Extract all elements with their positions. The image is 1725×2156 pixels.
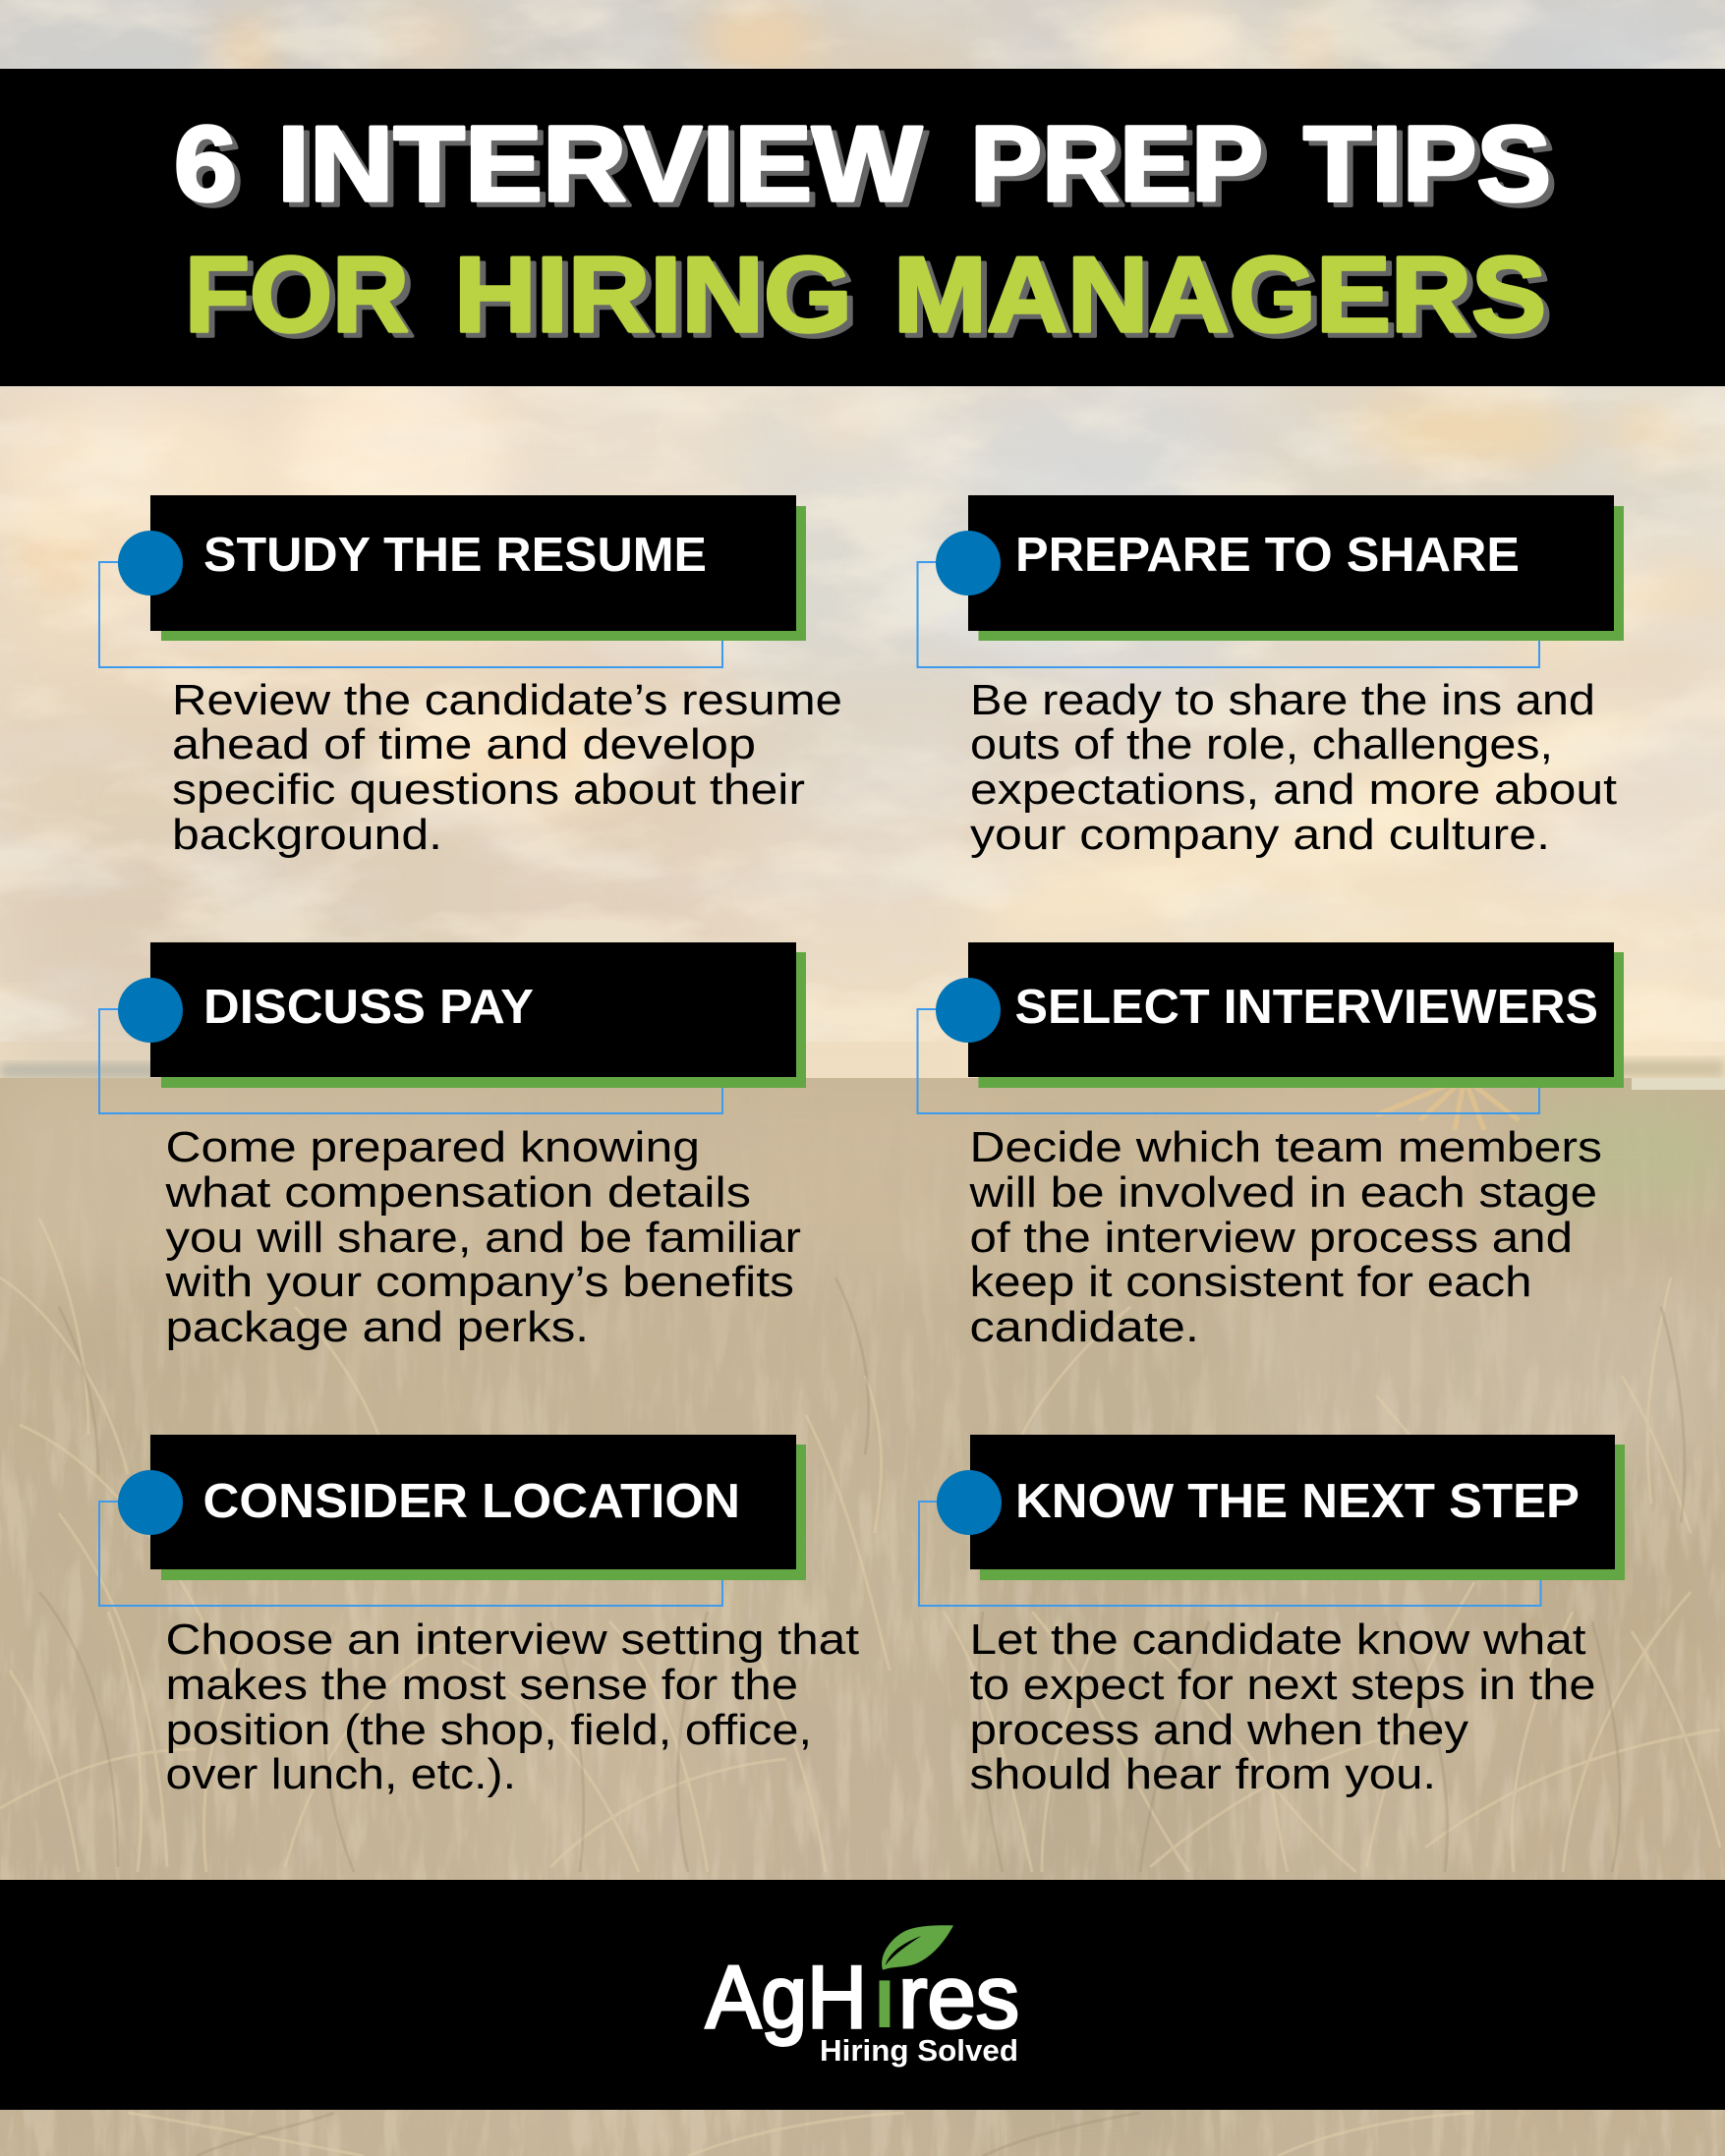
body text: keep it consistent for each — [969, 1258, 1531, 1306]
sun rays — [1376, 1088, 1520, 1131]
panel: know the next step — [919, 1435, 1625, 1798]
body text: over lunch, etc.). — [165, 1750, 516, 1798]
green offset shadow — [161, 952, 806, 1088]
body text — [968, 1123, 1602, 1351]
body text: outs of the role, challenges, — [970, 720, 1553, 768]
body text: position (the shop, field, office, — [165, 1706, 812, 1754]
body text — [172, 676, 842, 859]
blue dot — [936, 978, 1001, 1043]
heading: KNOW THE NEXT STEP — [1015, 1475, 1580, 1528]
logo: AgHires Hiring Solved: i — [874, 1949, 895, 2047]
straw texture — [0, 1315, 1725, 2156]
distant tree line, left — [0, 1063, 206, 1078]
heading: CONSIDER LOCATION — [202, 1475, 740, 1528]
body text: Decide which team members — [969, 1123, 1602, 1171]
connector outline — [99, 562, 722, 667]
wheat strands, light — [0, 1219, 1720, 2156]
body text: Choose an interview setting that — [165, 1616, 859, 1664]
heading bar — [150, 1435, 796, 1569]
body text — [165, 1616, 859, 1798]
panel: study the resume — [99, 495, 842, 859]
body text: expectations, and more about — [970, 766, 1617, 814]
heading bar — [968, 495, 1614, 631]
title line 2 — [185, 235, 1546, 355]
body text: Come prepared knowing — [165, 1123, 700, 1171]
body text — [969, 1616, 1596, 1798]
heading: DISCUSS PAY — [203, 981, 534, 1034]
logo: AgHires Hiring Solved: Hiring Solved — [820, 2033, 1018, 2068]
body text: your company and culture. — [970, 811, 1550, 859]
logo: AgHires Hiring Solved: AgH — [706, 1949, 867, 2047]
blue dot — [937, 1470, 1002, 1535]
title line 1: TIPS — [1303, 104, 1551, 224]
body text: of the interview process and — [969, 1214, 1573, 1262]
blue dot — [118, 1470, 183, 1535]
connector outline — [918, 562, 1539, 667]
body text: what compensation details — [164, 1168, 751, 1217]
body text: background. — [172, 811, 442, 859]
body text: Let the candidate know what — [969, 1616, 1586, 1664]
body text: specific questions about their — [172, 766, 805, 814]
green offset shadow — [979, 952, 1624, 1088]
panel: prepare to share — [918, 495, 1624, 859]
title line 2: FOR — [185, 235, 409, 355]
connector outline — [99, 1009, 722, 1113]
green offset shadow — [979, 506, 1624, 641]
title line 1: 6 — [174, 104, 237, 224]
body text: with your company’s benefits — [164, 1258, 794, 1306]
body text: makes the most sense for the — [165, 1661, 798, 1709]
body text: process and when they — [969, 1706, 1468, 1754]
blue dot — [936, 531, 1001, 596]
body text: will be involved in each stage — [968, 1168, 1597, 1217]
heading: STUDY THE RESUME — [203, 529, 707, 582]
title line 1 — [174, 104, 1551, 224]
heading bar — [970, 1435, 1615, 1569]
logo: AgHires Hiring Solved — [706, 1925, 1019, 2068]
body text — [164, 1123, 801, 1351]
body text — [970, 676, 1617, 859]
connector outline — [919, 1502, 1541, 1606]
panel: discuss pay — [99, 942, 806, 1351]
body text: should hear from you. — [969, 1750, 1436, 1798]
green offset shadow — [161, 506, 806, 641]
wheat strands, dark — [39, 1277, 1685, 2156]
blue dot — [118, 531, 183, 596]
body text: Review the candidate’s resume — [172, 676, 842, 724]
icon: leaf — [882, 1925, 953, 1970]
logo: AgHires Hiring Solved: res — [898, 1949, 1019, 2047]
connector outline — [918, 1009, 1539, 1113]
connector outline — [99, 1502, 722, 1606]
panel: select interviewers — [918, 942, 1624, 1351]
body text: to expect for next steps in the — [969, 1661, 1596, 1709]
body text: package and perks. — [165, 1303, 589, 1351]
body text: Be ready to share the ins and — [970, 676, 1595, 724]
body text: candidate. — [969, 1303, 1199, 1351]
title line 1: INTERVIEW — [277, 104, 922, 224]
body text: ahead of time and develop — [172, 720, 756, 768]
title line 2: HIRING — [454, 235, 852, 355]
title line 2: MANAGERS — [893, 235, 1546, 355]
footer band — [0, 1880, 1725, 2110]
green offset shadow — [161, 1445, 806, 1580]
header band — [0, 69, 1725, 386]
green offset shadow — [980, 1445, 1625, 1580]
panel: consider location — [99, 1435, 859, 1798]
heading: PREPARE TO SHARE — [1015, 529, 1520, 582]
title line 1: PREP — [970, 104, 1263, 224]
heading bar — [150, 942, 796, 1077]
cloud highlights — [0, 0, 1714, 946]
light track by field edge — [1632, 1078, 1725, 1090]
heading bar — [150, 495, 796, 631]
blue dot — [118, 978, 183, 1043]
heading: SELECT INTERVIEWERS — [1014, 981, 1598, 1034]
distant tree line, right — [1612, 1059, 1725, 1078]
heading bar — [968, 942, 1614, 1077]
body text: you will share, and be familiar — [165, 1214, 801, 1262]
